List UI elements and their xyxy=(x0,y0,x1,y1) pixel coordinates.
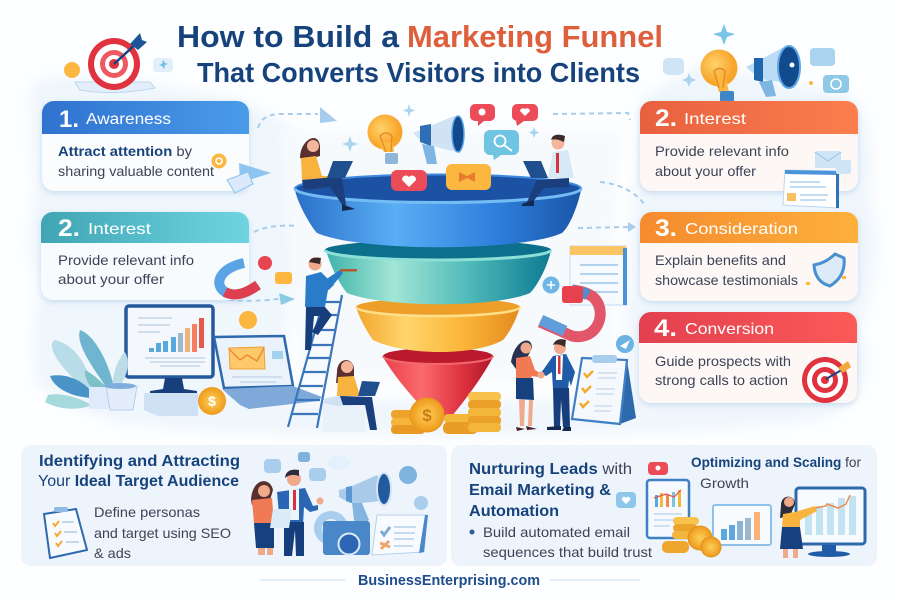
funnel tier 2: teal xyxy=(325,240,551,304)
panel: 2 Interest right xyxy=(640,101,858,191)
panel: 4 Conversion: 4. xyxy=(654,315,677,342)
illustration: laptop with email xyxy=(198,311,322,415)
panel: 1 Awareness xyxy=(42,101,249,191)
panel: 4 Conversion: strong calls to action xyxy=(655,372,788,388)
panel: 2 Interest right: 2. xyxy=(655,105,677,132)
coins stacks: $ xyxy=(422,406,432,425)
panel: 3 Consideration: Consideration xyxy=(685,221,798,238)
funnel xyxy=(295,174,581,416)
panel: bottom right: Growth xyxy=(700,475,749,491)
icon: megaphone xyxy=(413,116,464,164)
panel: bottom right: Build automated email xyxy=(483,524,630,540)
panel: 1 Awareness: Awareness xyxy=(86,111,171,128)
icon: chat bubbles xyxy=(470,104,538,160)
panel: bottom right: Optimizing and Scaling for xyxy=(691,454,861,470)
panel: bottom left: & ads xyxy=(94,545,131,561)
panel: 2 Interest left: about your offer xyxy=(58,271,164,287)
footer website: BusinessEnterprising.com xyxy=(358,573,540,589)
person: man on funnel right xyxy=(522,135,574,206)
panel: bottom right: Nurturing Leads with xyxy=(469,461,632,478)
icon: shield xyxy=(806,254,846,286)
panel: 2 Interest right: Interest xyxy=(684,111,747,128)
funnel tier 1: blue xyxy=(295,174,581,247)
panel: bottom right: sequences that build trust xyxy=(483,544,652,560)
panel: 1 Awareness: 1. xyxy=(59,106,79,133)
background blobs xyxy=(29,65,876,436)
icon: megaphone bottom xyxy=(339,473,391,527)
icon: email document xyxy=(783,151,851,208)
panel: bottom left xyxy=(21,445,447,566)
panel: 3 Consideration: showcase testimonials xyxy=(655,272,798,288)
panel: 1 Awareness: Attract attention by xyxy=(58,143,192,159)
floating icons above funnel xyxy=(342,104,540,191)
person: seated woman with laptop xyxy=(323,360,380,432)
panel: 4 Conversion xyxy=(639,312,857,403)
icon: target top left xyxy=(64,33,173,93)
icon: bulb and megaphone top right xyxy=(663,24,849,103)
panel: bottom left: Identifying and Attracting xyxy=(39,453,240,470)
person: woman presenting xyxy=(780,497,817,558)
sparkles xyxy=(342,104,540,152)
icon: gear and camera xyxy=(314,511,370,555)
panel: 2 Interest left xyxy=(41,212,249,300)
person: man on ladder with ladder xyxy=(288,258,357,428)
panel: 4 Conversion: Conversion xyxy=(685,321,774,338)
icon: magnet left xyxy=(219,256,292,294)
panel: 2 Interest left: 2. xyxy=(58,215,80,242)
title xyxy=(177,19,663,88)
panel: bottom left: Define personas xyxy=(94,504,200,520)
panel: 3 Consideration: 3. xyxy=(655,215,677,242)
people: presenter and colleague xyxy=(251,470,324,556)
panel: 2 Interest right: about your offer xyxy=(655,163,756,179)
panel: bottom right: Email Marketing & xyxy=(469,482,611,499)
icon: checklist document xyxy=(372,515,428,555)
icon: mail bubble xyxy=(446,164,491,190)
person: woman on funnel left xyxy=(300,138,355,211)
icon: heart bubble xyxy=(391,170,427,191)
panel: 1 Awareness: sharing valuable content xyxy=(58,163,214,179)
coins stacks xyxy=(391,392,501,434)
icon: monitor with trend xyxy=(796,488,865,557)
funnel tier 3: yellow xyxy=(356,298,520,352)
panel: bottom right: Automation xyxy=(469,503,559,520)
icon: document center right xyxy=(570,246,627,305)
illustration: desktop monitor xyxy=(126,306,213,416)
panel: 4 Conversion: Guide prospects with xyxy=(655,353,791,369)
panel: 3 Consideration xyxy=(640,212,858,301)
panel: 2 Interest right: Provide relevant info xyxy=(655,143,789,159)
panel: bottom left: and target using SEO xyxy=(94,525,231,541)
title: Marketing Funnel xyxy=(407,19,663,54)
panel: 3 Consideration: Explain benefits and xyxy=(655,252,786,268)
title: That Converts Visitors into Clients xyxy=(197,57,640,88)
icon: gold coins xyxy=(662,517,721,557)
people: handshake xyxy=(511,339,575,431)
icon: right clipboard xyxy=(572,335,636,424)
panel: 2 Interest left: Interest xyxy=(88,221,152,238)
icon: bar chart screen xyxy=(713,505,771,545)
icon: light bulb xyxy=(368,114,402,164)
panel: bottom left: Your Ideal Target Audience xyxy=(38,473,239,490)
panel: 2 Interest left: Provide relevant info xyxy=(58,252,194,268)
panel: bottom right xyxy=(451,445,877,566)
dashed flow arrows xyxy=(203,107,645,305)
illustration: plant and pots xyxy=(45,330,137,410)
illustration: laptop with email: $ xyxy=(208,393,216,409)
icon: target right xyxy=(802,357,851,403)
icon: chat bubbles bottom xyxy=(264,452,428,510)
icon: clipboard xyxy=(44,507,87,558)
funnel tier 4: red xyxy=(383,348,493,416)
icon: paper plane xyxy=(212,154,271,193)
icon: tablet chart xyxy=(647,480,689,538)
icon: social bubbles xyxy=(616,462,668,508)
title: How to Build a xyxy=(177,19,400,54)
icon: magnet center right xyxy=(540,276,600,337)
